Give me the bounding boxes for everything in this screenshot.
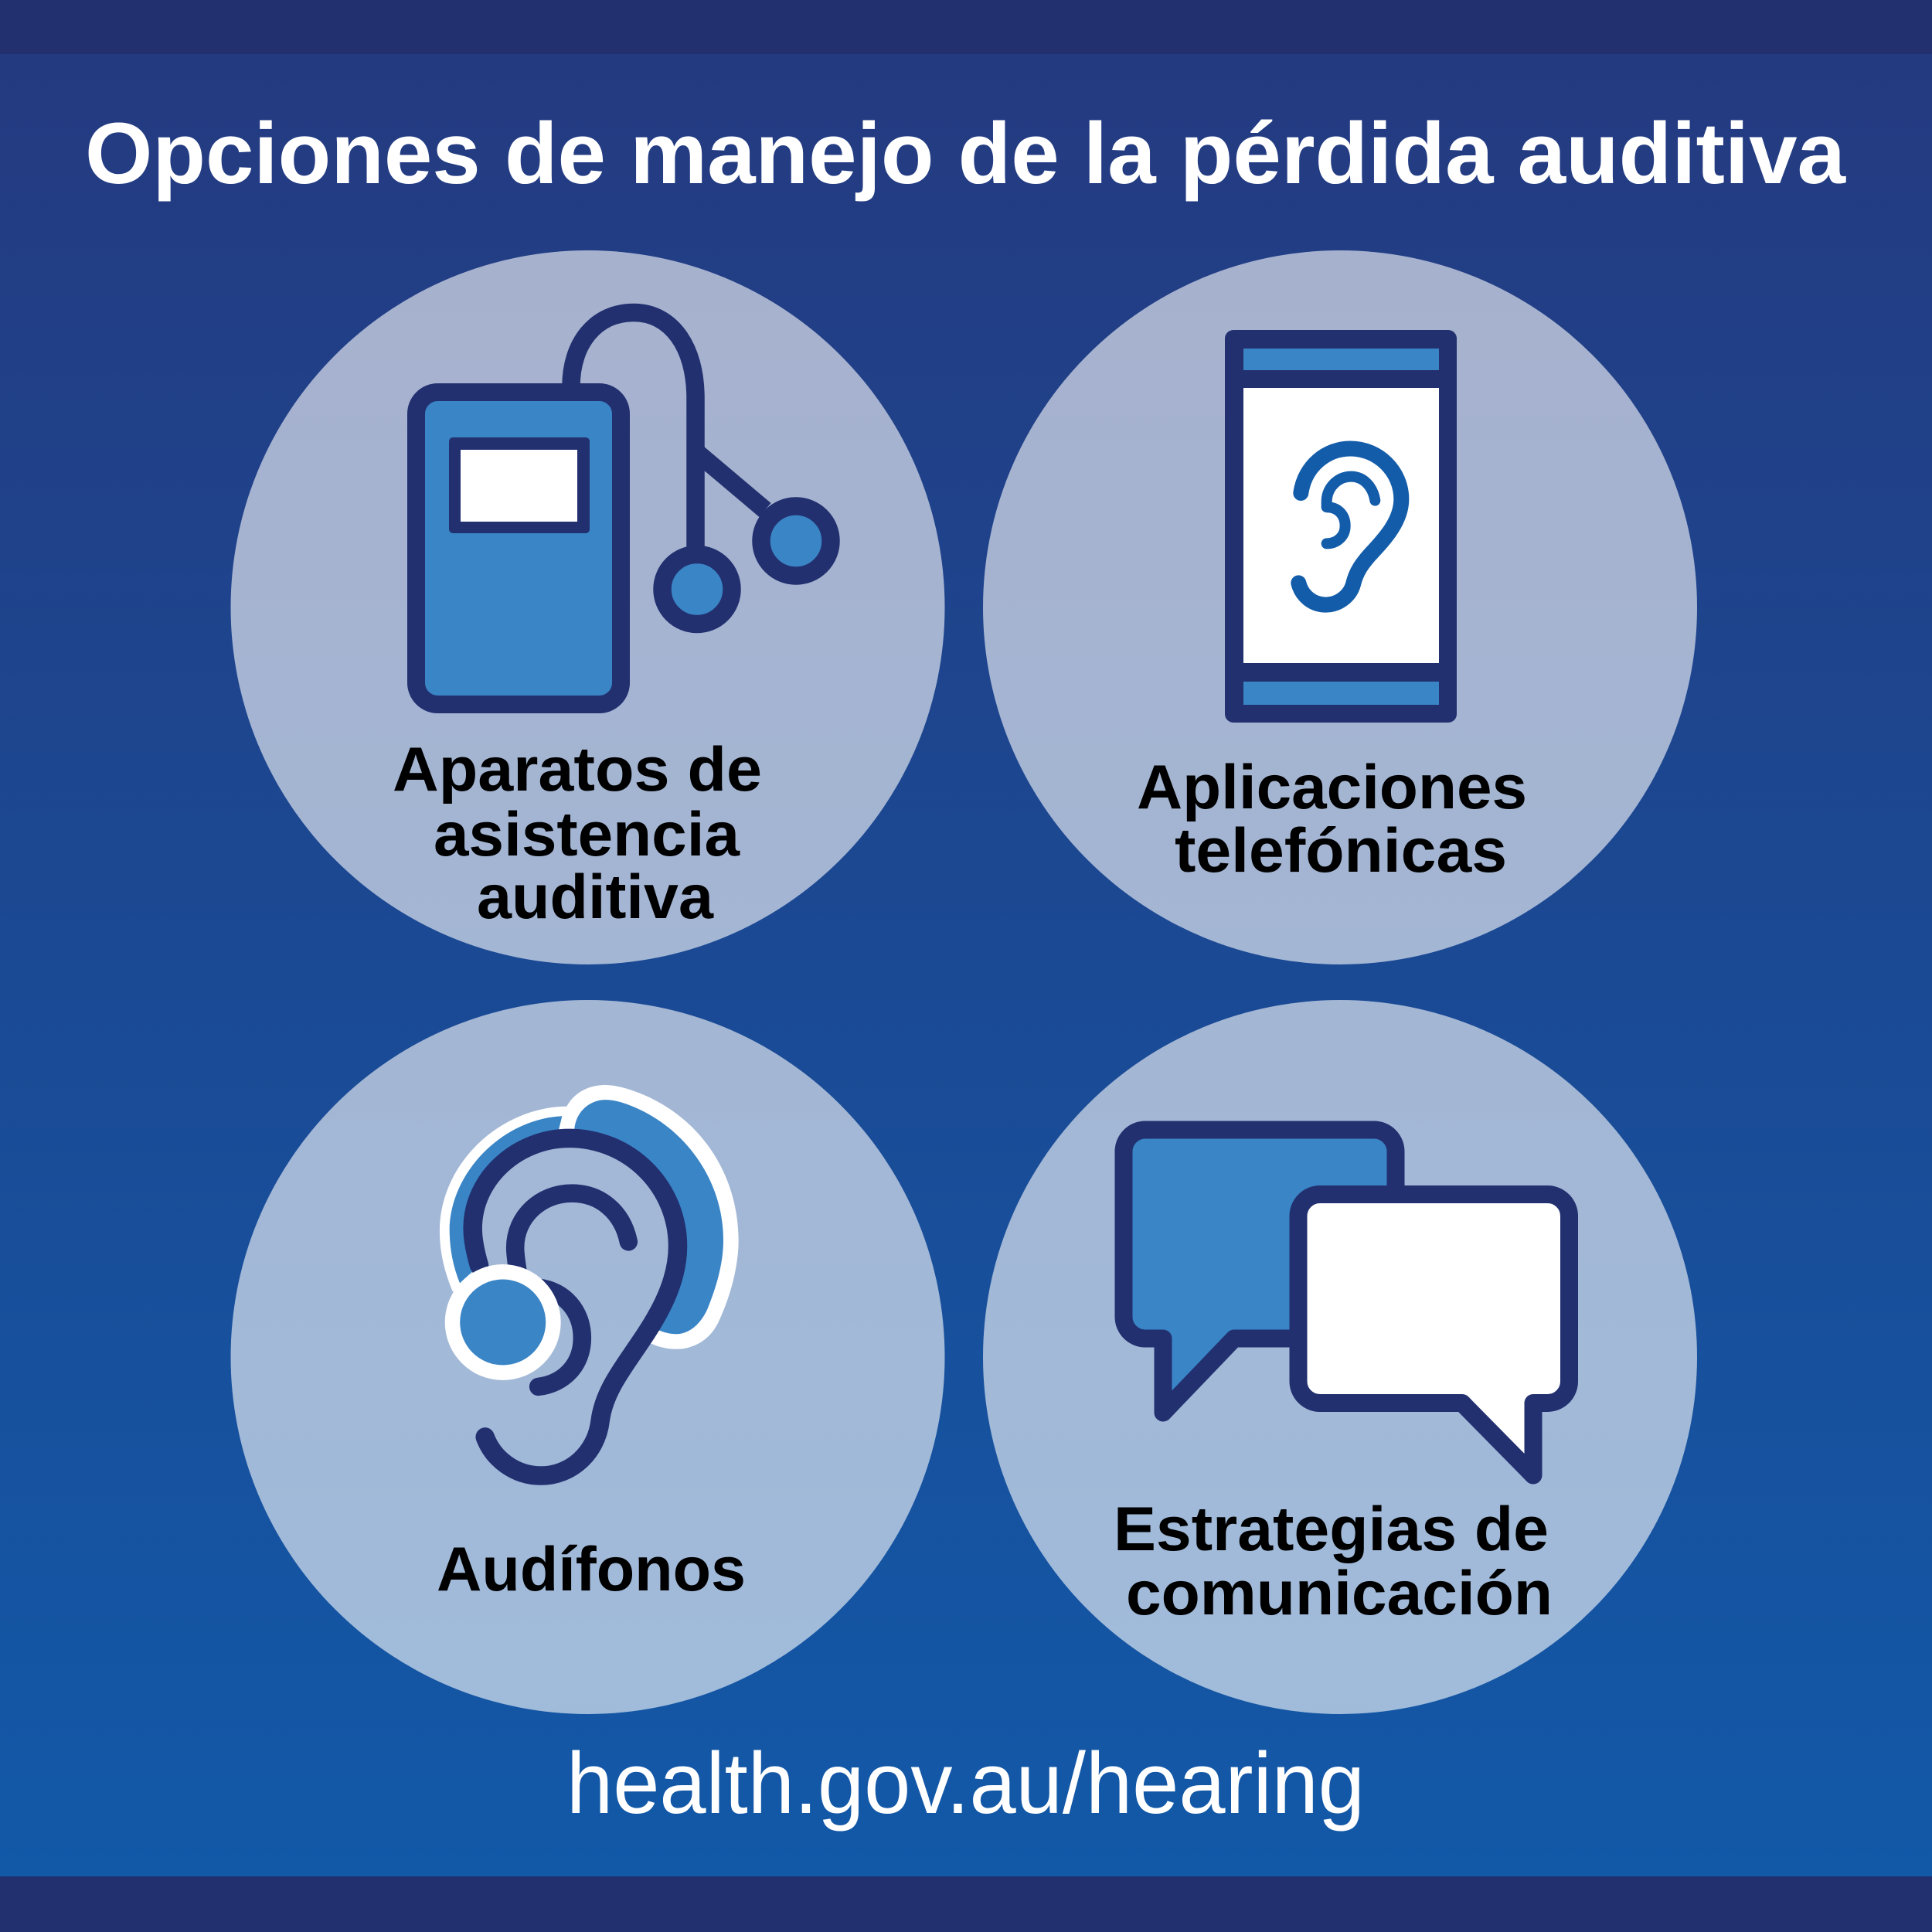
panel: audífonos	[230, 1000, 944, 1714]
label	[1114, 1495, 1553, 1628]
label: Estrategias de	[1114, 1495, 1549, 1564]
icon: assistive listening device	[416, 312, 831, 705]
label: comunicación	[1126, 1559, 1553, 1628]
panel: aparatos de asistencia auditiva	[230, 250, 944, 964]
panel circle	[983, 250, 1697, 964]
icon: speech bubbles	[1124, 1130, 1569, 1475]
panel: estrategias de comunicación	[983, 1000, 1697, 1714]
panel circle	[230, 1000, 944, 1714]
label: Aplicaciones	[1137, 753, 1527, 822]
label: telefónicas	[1175, 816, 1507, 886]
footer url: health.gov.au/hearing	[566, 1735, 1365, 1832]
label	[393, 735, 762, 932]
icon: phone with ear	[1225, 330, 1457, 723]
panel circle	[230, 250, 944, 964]
label: auditiva	[477, 862, 714, 932]
bottom band	[0, 1876, 1932, 1932]
label: Aparatos de	[393, 735, 762, 804]
title: Opciones de manejo de la pérdida auditiva	[85, 105, 1846, 202]
top band	[0, 0, 1932, 54]
panel: aplicaciones telefónicas	[983, 250, 1697, 964]
panel circle	[983, 1000, 1697, 1714]
icon: hearing aid receiver	[445, 1264, 561, 1380]
label: asistencia	[434, 800, 740, 869]
label: Audífonos	[437, 1535, 746, 1604]
icon: ear with hearing aid	[440, 1085, 739, 1476]
label	[1137, 753, 1527, 886]
